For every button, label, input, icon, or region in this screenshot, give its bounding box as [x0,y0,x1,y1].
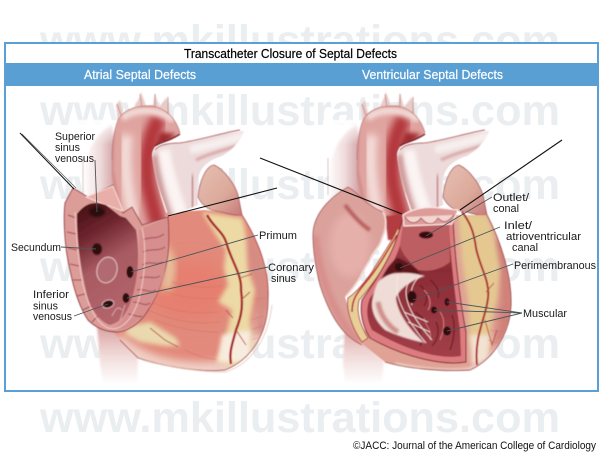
label: muscular: Muscular [523,308,567,320]
watermark text: www.mkillustrations.com [39,320,560,368]
label: coronary sinus: sinus [271,273,296,285]
inferior vena cava [343,325,385,384]
illustration: ventricular heart [305,92,520,384]
label: inlet atrioventricular canal: Inlet/ [504,220,533,232]
label: coronary sinus: Coronary [268,262,314,274]
great vessels [78,92,250,230]
great vessels [323,92,495,230]
ventricular wall rim [361,215,466,363]
coronary fat [458,212,500,362]
label: inferior sinus venosus: sinus [33,300,58,312]
label: inlet atrioventricular canal: canal [512,242,538,254]
label: inlet atrioventricular canal: atrioventricular [506,231,581,243]
illustration: atrial heart [64,92,275,384]
muscle striations [166,282,264,360]
red base of aorta [385,214,412,240]
header band [5,63,598,86]
label: inferior sinus venosus: venosus [33,311,72,323]
title bar [6,44,597,63]
label: inferior sinus venosus [33,289,72,323]
heart body [114,209,268,371]
atrial flap [112,218,168,329]
inner rim [75,212,145,329]
inferior vena cava [97,325,140,384]
label: superior sinus venosus: Superior [55,131,95,143]
fossa ovalis ring [94,255,120,285]
label: secundum: Secundum [11,242,61,254]
label: coronary sinus [268,262,314,285]
label: outlet conal: Outlet/ [493,192,530,204]
label: primum: Primum [259,230,297,242]
pulmonary valve strip [403,207,458,226]
heart body [360,214,512,370]
label: perimembranous: Perimembranous [514,260,596,272]
atrial wall fold [86,186,123,211]
dark recess [376,258,422,292]
upper septal wall [400,222,450,271]
label: superior sinus venosus: sinus [55,142,80,154]
catheter lines [20,133,562,216]
chamber [367,222,461,357]
label: superior sinus venosus: venosus [55,153,94,165]
atrium cavity [77,203,138,325]
heading: ventricular: Ventricular Septal Defects [362,68,503,82]
valve cords [397,276,432,343]
tricuspid valve [372,273,425,343]
right atrium scalloped edge [346,212,386,296]
defects [92,243,102,255]
label: inlet atrioventricular canal [504,220,581,254]
open atrium rim [64,185,169,332]
watermark text: www.mkillustrations.com [39,17,560,65]
defects [419,232,433,238]
label: outlet conal: conal [493,203,519,215]
label: superior sinus venosus [55,131,95,165]
coronary artery [207,215,242,364]
trabeculae [415,280,454,350]
right atrium [312,187,386,344]
watermark text: www.mkillustrations.com [39,243,560,291]
title bar: Transcatheter Closure of Septal Defects [184,47,397,61]
heading: atrial: Atrial Septal Defects [84,68,196,82]
left fat strip [348,228,404,342]
coronary fat [202,212,255,366]
panel frame [5,43,598,391]
leader lines [61,160,522,331]
label: inferior sinus venosus: Inferior [33,289,69,301]
bottom folds [112,305,125,320]
watermark text: www.mkillustrations.com [39,161,560,209]
watermark text: www.mkillustrations.com [39,394,560,442]
label: outlet conal [493,192,530,215]
watermark text: www.mkillustrations.com [39,87,560,135]
anterior coronary artery [462,212,488,365]
